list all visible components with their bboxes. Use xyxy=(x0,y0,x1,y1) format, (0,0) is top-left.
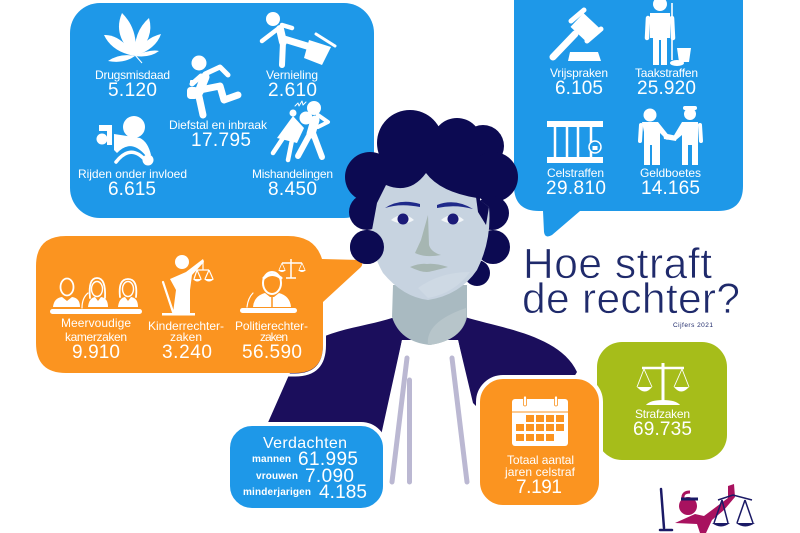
number: 5.120: 5.120 xyxy=(108,80,157,101)
right hair lock xyxy=(476,197,489,225)
collar stripes xyxy=(392,358,467,482)
icon: cannabis leaf xyxy=(104,13,161,63)
hair xyxy=(345,110,518,286)
number: 8.450: 8.450 xyxy=(268,179,317,200)
title xyxy=(522,241,740,323)
icon: fine handover xyxy=(640,106,701,165)
chin highlight xyxy=(418,272,470,298)
number: 2.610: 2.610 xyxy=(268,80,317,101)
panel: suspects xyxy=(228,424,385,510)
label: Celstraffen: Celstraffen xyxy=(547,166,604,180)
icon: running thief xyxy=(187,56,238,115)
icon: scales xyxy=(637,363,689,405)
label: Meervoudige kamerzaken: Meervoudige xyxy=(61,316,131,330)
nose xyxy=(415,215,441,256)
icon: prison bars xyxy=(547,121,603,163)
number: 9.910: 9.910 xyxy=(72,342,120,363)
label line 2: kamerzaken xyxy=(65,330,127,344)
white shirt xyxy=(380,340,478,490)
number: 14.165: 14.165 xyxy=(641,178,700,199)
face xyxy=(372,173,490,300)
icon: assault xyxy=(273,101,328,160)
label: Drugsmisdaad: Drugsmisdaad xyxy=(95,68,170,82)
number: 29.810: 29.810 xyxy=(546,178,606,199)
label: Totaal aantal: Totaal aantal xyxy=(507,453,574,467)
number: 25.920: 25.920 xyxy=(637,78,696,99)
icon: drunk driver xyxy=(96,116,154,166)
left eye xyxy=(391,214,414,224)
icon: community service worker xyxy=(647,0,691,66)
icon: gavel xyxy=(553,10,601,61)
label: Rijden onder invloed: Rijden onder invloed xyxy=(78,167,187,181)
caption: Cijfers 2021: Cijfers 2021 xyxy=(673,322,713,329)
number: 6.105: 6.105 xyxy=(555,78,603,99)
number: 7.090: 7.090 xyxy=(305,466,354,487)
icon: lady justice xyxy=(162,255,214,316)
label: Strafzaken: Strafzaken xyxy=(635,407,690,421)
label: Taakstraffen: Taakstraffen xyxy=(635,66,698,80)
hair curl over speech tail xyxy=(350,230,384,264)
icon: three-judge panel xyxy=(50,278,142,314)
title: de rechter? xyxy=(522,276,740,323)
number: 7.191: 7.191 xyxy=(516,477,562,498)
neck xyxy=(392,285,467,345)
label: mannen: mannen xyxy=(252,454,291,465)
number: 17.795: 17.795 xyxy=(191,130,251,151)
icon: calendar xyxy=(512,396,568,446)
number: 61.995: 61.995 xyxy=(298,449,358,470)
label: Kinderrechter-zaken: Kinderrechter- xyxy=(148,319,224,333)
right eyebrow xyxy=(437,202,473,209)
panel: court types xyxy=(36,230,384,375)
mouth xyxy=(410,264,448,272)
label: minderjarigen: minderjarigen xyxy=(243,487,311,498)
label: vrouwen: vrouwen xyxy=(256,471,298,482)
label line 2: zaken xyxy=(260,330,288,344)
label line 2: zaken xyxy=(170,330,202,344)
illustration: judge xyxy=(260,110,577,490)
panel: criminal cases xyxy=(597,342,727,460)
right eye xyxy=(441,214,464,224)
label: Diefstal en inbraak: Diefstal en inbraak xyxy=(169,118,268,132)
label line 2: jaren celstraf xyxy=(504,465,576,479)
label: Vernieling: Vernieling xyxy=(266,68,318,82)
icon: police judge xyxy=(240,259,306,313)
robe xyxy=(260,317,577,440)
number: 69.735: 69.735 xyxy=(633,419,692,440)
heading: Verdachten: Verdachten xyxy=(263,435,347,452)
left eyebrow xyxy=(385,202,420,208)
panel: sentences xyxy=(514,0,743,236)
panel: offences xyxy=(70,3,374,218)
number: 4.185: 4.185 xyxy=(319,482,367,503)
label: Politierechter-zaken: Politierechter- xyxy=(235,319,308,333)
label: Geldboetes: Geldboetes xyxy=(640,166,701,180)
label: Vrijspraken: Vrijspraken xyxy=(550,66,608,80)
panel: total prison years xyxy=(478,377,601,507)
neck highlight xyxy=(428,308,466,345)
number: 6.615: 6.615 xyxy=(108,179,156,200)
icon: kicking vandal xyxy=(262,12,335,65)
number: 3.240: 3.240 xyxy=(162,342,212,363)
label: Mishandelingen: Mishandelingen xyxy=(252,167,333,181)
number: 56.590: 56.590 xyxy=(242,342,302,363)
logo: justice figure xyxy=(660,484,755,533)
title: Hoe straft xyxy=(523,241,712,288)
